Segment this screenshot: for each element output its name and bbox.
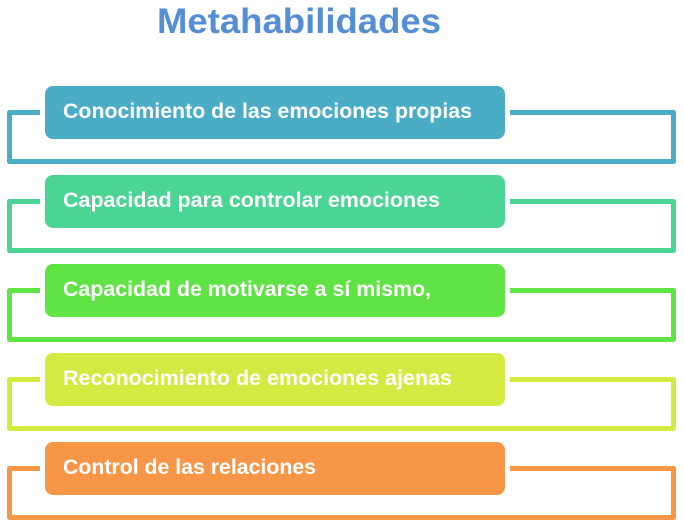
item 1: Conocimiento de las emociones propias <box>10 86 674 162</box>
item 2: Capacidad para controlar emociones <box>10 175 674 250</box>
item 5 frame <box>10 468 674 518</box>
item 3 label: Capacidad de motivarse a sí mismo, <box>63 278 431 301</box>
item 4 label: Reconocimiento de emociones ajenas <box>63 367 452 390</box>
item 2 label: Capacidad para controlar emociones <box>63 189 440 212</box>
title: Metahabilidades <box>157 2 441 41</box>
item 3 box <box>45 264 505 317</box>
item 4 frame <box>10 380 674 428</box>
item 4 box <box>45 353 505 406</box>
item 1 frame <box>10 112 674 162</box>
item 3 frame <box>10 290 674 340</box>
item 4: Reconocimiento de emociones ajenas <box>10 353 674 428</box>
item 1 box <box>45 86 505 139</box>
item 2 frame <box>10 202 674 250</box>
item 2 box <box>45 175 505 228</box>
item 5 box <box>45 442 505 495</box>
item 5: Control de las relaciones <box>10 442 674 518</box>
item 5 label: Control de las relaciones <box>63 456 316 479</box>
item 3: Capacidad de motivarse a sí mismo <box>10 264 674 340</box>
item 1 label: Conocimiento de las emociones propias <box>63 100 472 123</box>
